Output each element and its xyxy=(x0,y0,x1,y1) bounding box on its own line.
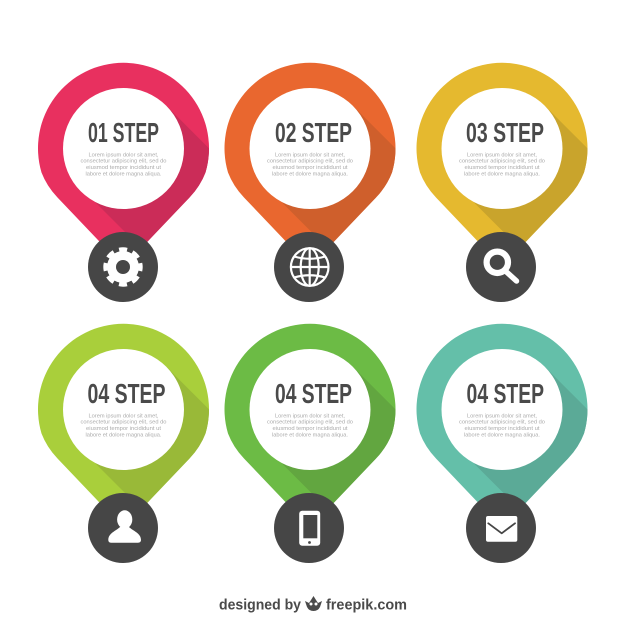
body text: Lorem ipsum dolor sit amet, xyxy=(467,152,537,158)
body text xyxy=(267,414,353,438)
icon: person xyxy=(88,493,158,563)
inner circle xyxy=(442,349,562,470)
heading: 01 STEP xyxy=(88,117,159,148)
pin shape xyxy=(416,63,588,267)
heading: 04 STEP xyxy=(88,378,166,409)
body text xyxy=(459,152,545,178)
body text: Lorem ipsum dolor sit amet, xyxy=(88,152,159,158)
body text xyxy=(459,414,545,438)
body text xyxy=(80,152,166,178)
body text: consectetur adipiscing elit, sed do xyxy=(267,420,353,426)
long shadow xyxy=(94,106,209,242)
body text: consectetur adipiscing elit, sed do xyxy=(459,159,545,165)
inner circle xyxy=(442,88,562,209)
body text: eiusmod tempor incididunt ut xyxy=(464,165,540,171)
long shadow xyxy=(473,106,588,242)
inner circle xyxy=(63,88,184,209)
long shadow xyxy=(282,368,396,503)
heading: 04 STEP xyxy=(467,378,544,409)
heading: 02 STEP xyxy=(275,117,352,148)
inner circle xyxy=(250,349,370,470)
body text: labore et dolore magna aliqua. xyxy=(272,172,348,178)
pin shape xyxy=(38,324,209,528)
panel: step 01 pin xyxy=(38,62,209,242)
body text: labore et dolore magna aliqua. xyxy=(86,432,162,438)
body text: Lorem ipsum dolor sit amet, xyxy=(275,414,345,420)
icon: freepik logo xyxy=(305,596,322,611)
body text: eiusmod tempor incididunt ut xyxy=(464,426,540,432)
long shadow xyxy=(281,106,396,242)
body text: Lorem ipsum dolor sit amet, xyxy=(275,152,345,158)
long shadow xyxy=(95,368,209,503)
pin shape xyxy=(224,63,396,267)
footer credit: designed by xyxy=(219,598,301,614)
footer credit xyxy=(219,596,407,614)
body text: consectetur adipiscing elit, sed do xyxy=(80,159,166,165)
heading: 03 STEP xyxy=(466,117,544,148)
footer credit: freepik.com xyxy=(326,598,407,614)
panel: step 04 teal pin xyxy=(416,324,588,503)
long shadow xyxy=(474,368,588,503)
icon: gear xyxy=(88,232,158,302)
icon: globe xyxy=(274,232,344,302)
body text: labore et dolore magna aliqua. xyxy=(464,432,540,438)
body text: eiusmod tempor incididunt ut xyxy=(272,165,348,171)
icon: magnifier xyxy=(466,232,536,302)
body text: eiusmod tempor incididunt ut xyxy=(86,165,161,171)
inner circle xyxy=(250,88,370,209)
pin shape xyxy=(416,324,588,528)
body text: consectetur adipiscing elit, sed do xyxy=(80,420,166,426)
body text xyxy=(267,152,353,178)
body text: consectetur adipiscing elit, sed do xyxy=(459,420,545,426)
body text xyxy=(80,414,166,438)
icon: envelope xyxy=(466,493,536,563)
heading: 04 STEP xyxy=(275,378,352,409)
pin shape xyxy=(38,63,209,267)
body text: Lorem ipsum dolor sit amet, xyxy=(88,414,159,420)
body text: eiusmod tempor incididunt ut xyxy=(272,426,348,432)
body text: consectetur adipiscing elit, sed do xyxy=(267,159,353,165)
body text: labore et dolore magna aliqua. xyxy=(464,172,540,178)
panel: step 04 green pin xyxy=(224,324,396,503)
body text: eiusmod tempor incididunt ut xyxy=(86,426,161,432)
body text: Lorem ipsum dolor sit amet, xyxy=(467,414,537,420)
panel: step 04 lime pin xyxy=(38,324,209,503)
panel: step 02 pin xyxy=(224,62,396,242)
inner circle xyxy=(63,349,184,470)
body text: labore et dolore magna aliqua. xyxy=(86,172,162,178)
panel: step 03 pin xyxy=(416,62,588,242)
body text: labore et dolore magna aliqua. xyxy=(272,432,348,438)
pin shape xyxy=(224,324,396,528)
icon: phone xyxy=(274,493,344,563)
